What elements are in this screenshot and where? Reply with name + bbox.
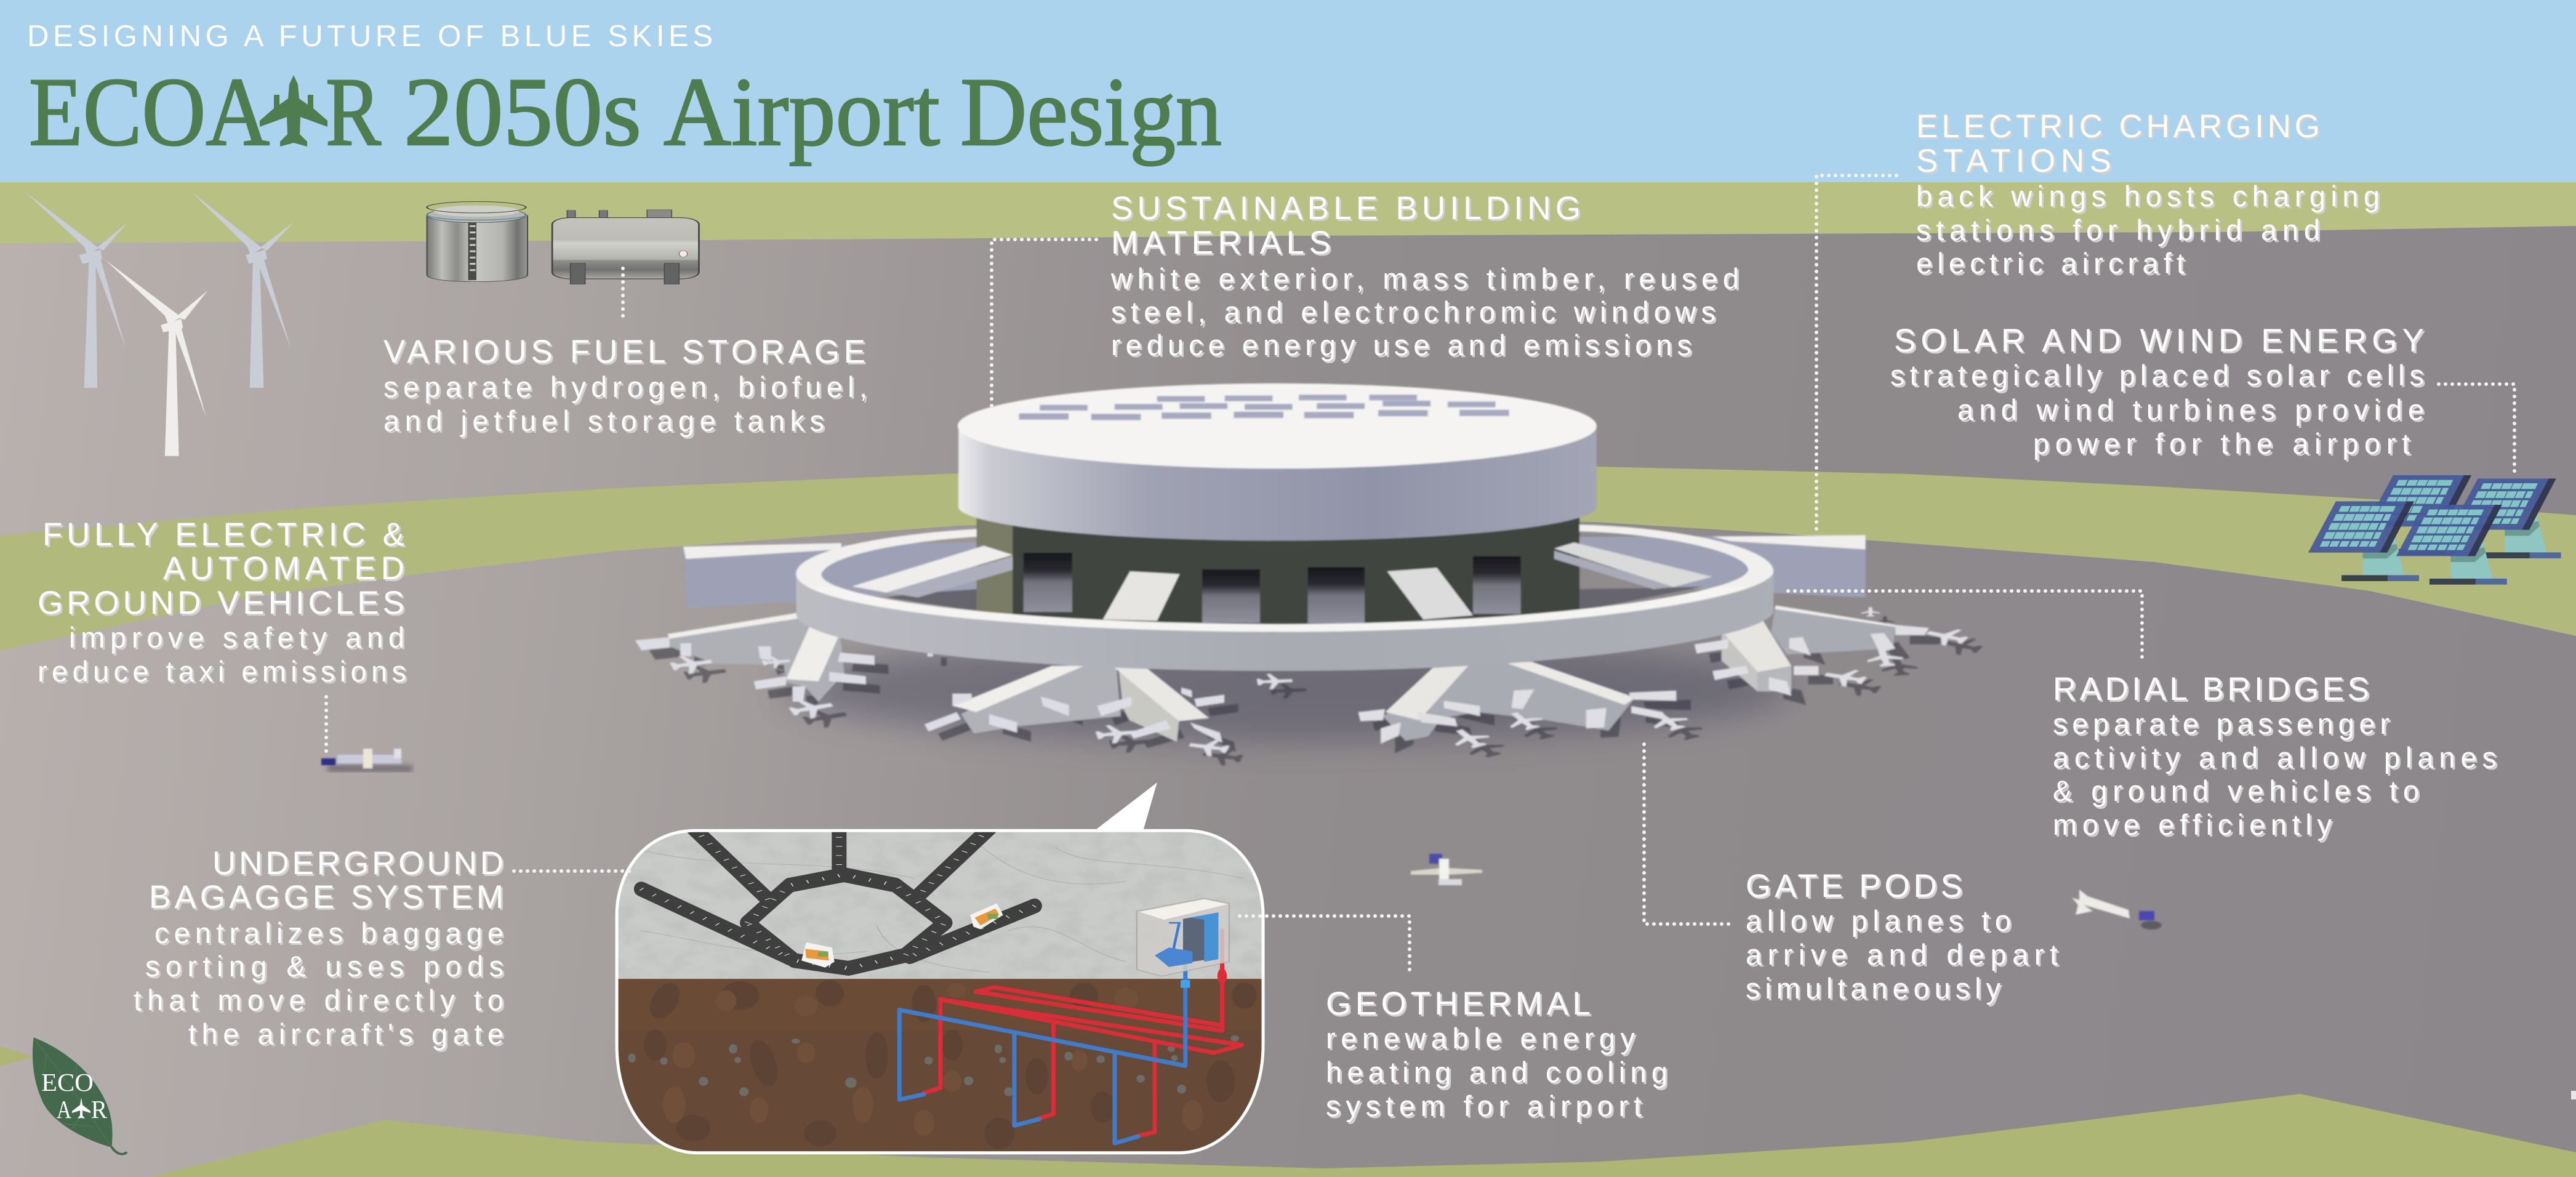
body: reduce taxi emissions	[38, 655, 406, 688]
concrete slab	[613, 829, 1268, 979]
body: separate hydrogen, biofuel,	[383, 371, 867, 403]
title: 2050s	[404, 58, 641, 166]
roof cylinder	[958, 384, 1597, 540]
title: Airport	[664, 58, 940, 166]
heading	[1111, 190, 1581, 261]
body: power for the airport	[2033, 427, 2410, 460]
body: sorting & uses pods	[145, 950, 504, 982]
logo: eco air leaf	[33, 1037, 126, 1154]
inset: baggage and geothermal cutaway	[613, 782, 1268, 1155]
logo wordmark: ECO	[41, 1068, 94, 1096]
body: and wind turbines provide	[1957, 393, 2424, 426]
callout: underground baggage system	[134, 845, 504, 1050]
body: strategically placed solar cells	[1890, 359, 2424, 392]
subtitle: DESIGNING A FUTURE OF BLUE SKIES	[27, 20, 713, 53]
title block	[27, 20, 1222, 166]
callout: solar and wind energy	[1890, 323, 2424, 460]
back wings	[683, 535, 1866, 608]
underground soil	[613, 979, 1268, 1155]
heading: UNDERGROUND	[212, 845, 504, 882]
leader: solar and wind	[2439, 384, 2514, 477]
callout: radial bridges	[2053, 671, 2497, 841]
title	[29, 58, 1222, 166]
body: and jetfuel storage tanks	[383, 404, 824, 437]
body: electric aircraft	[1916, 247, 2185, 279]
body	[1890, 359, 2424, 460]
inset outline	[617, 830, 1263, 1153]
body: improve safety and	[69, 621, 404, 654]
body: that move directly to	[134, 984, 504, 1016]
body: back wings hosts charging	[1916, 180, 2380, 212]
south-east and east gate pod piers	[1358, 605, 1988, 760]
callout: gate pods	[1746, 868, 2058, 1005]
aircraft: west apron	[321, 749, 412, 772]
logo wordmark: A	[57, 1095, 71, 1123]
title: ECOA	[29, 58, 270, 166]
body: the aircraft's gate	[188, 1018, 504, 1050]
baggage pods	[801, 903, 1003, 968]
heat pump unit	[1137, 898, 1229, 988]
body: separate passenger	[2053, 707, 2389, 740]
callout: various fuel storage	[383, 334, 867, 437]
body: heating and cooling	[1326, 1056, 1667, 1088]
aircraft shadows west	[649, 646, 1307, 767]
body	[1326, 1022, 1667, 1122]
icon: fuel storage tanks	[427, 202, 699, 284]
heading: GEOTHERMAL	[1326, 986, 1591, 1022]
parked aircraft east	[1358, 607, 1973, 750]
leaf shape	[33, 1037, 126, 1154]
callout: sustainable building materials	[1110, 190, 1739, 361]
leader: charging stations	[1816, 175, 1896, 532]
ground shadow below terminal	[782, 637, 1791, 742]
leader: geothermal	[1240, 916, 1410, 974]
body: steel, and electrochromic windows	[1111, 295, 1715, 328]
south-east pier	[1383, 662, 1635, 741]
heading	[149, 845, 504, 915]
heading: SOLAR AND WIND ENERGY	[1894, 323, 2424, 359]
aircraft: far east edge	[2571, 1091, 2576, 1099]
heading: RADIAL BRIDGES	[2053, 671, 2369, 707]
icon: solar panels	[2308, 475, 2561, 585]
icon: wind turbines	[25, 191, 294, 456]
grass: top band	[0, 182, 2576, 243]
logo wordmark: R	[91, 1095, 108, 1123]
inner bridges	[852, 542, 1712, 621]
leader: ground vehicles	[324, 697, 328, 757]
callout: electric charging stations	[1916, 108, 2380, 279]
aircraft: centre apron	[1411, 854, 1482, 885]
body	[1746, 904, 2058, 1005]
body: white exterior, mass timber, reused	[1110, 262, 1739, 295]
body: stations for hybrid and	[1916, 214, 2320, 246]
heading: GROUND VEHICLES	[38, 585, 404, 621]
horizontal tank	[552, 210, 699, 284]
leader: gate pods	[1644, 744, 1731, 924]
leader: radial bridges	[1788, 591, 2142, 661]
heading: BAGAGGE SYSTEM	[149, 879, 504, 915]
title: Design	[960, 58, 1222, 166]
parked aircraft west	[635, 637, 1294, 758]
leader: baggage	[514, 869, 632, 873]
heading: FULLY ELECTRIC &	[42, 516, 404, 553]
grass: ring band around the airport	[0, 467, 2576, 651]
grass: left edge patch	[0, 1046, 34, 1066]
geothermal pipes	[899, 931, 1242, 1143]
body	[2053, 707, 2497, 841]
baggage conveyors	[641, 828, 1035, 968]
heading: GATE PODS	[1746, 868, 1962, 904]
vertical tank	[427, 202, 528, 282]
west and south-west gate pod piers	[635, 613, 1307, 767]
callout: fully electric ground vehicles	[38, 516, 406, 688]
body: simultaneously	[1746, 972, 2000, 1005]
terminal body: back wings, rear ring, core and roof	[683, 384, 1866, 632]
body: system for airport	[1326, 1090, 1642, 1122]
title: R	[326, 58, 381, 166]
inset clipped illustration	[613, 828, 1268, 1155]
body: allow planes to	[1746, 904, 2011, 937]
rooftop solar panels	[1019, 395, 1509, 420]
heading	[1916, 108, 2320, 179]
heading: VARIOUS FUEL STORAGE	[383, 334, 865, 370]
callout: geothermal	[1326, 986, 1667, 1122]
heading	[38, 516, 404, 621]
inset pointer	[1094, 782, 1157, 831]
body	[383, 371, 867, 437]
body: reduce energy use and emissions	[1111, 329, 1691, 361]
inner building core	[977, 507, 1579, 625]
west pier	[667, 613, 845, 702]
body: centralizes baggage	[154, 917, 504, 949]
south-west pier	[952, 665, 1210, 742]
body	[1916, 180, 2380, 279]
heading: AUTOMATED	[163, 550, 404, 587]
rear of outer ring	[796, 524, 1773, 632]
heading: MATERIALS	[1111, 225, 1331, 261]
sky band	[0, 0, 2576, 182]
east pier	[1722, 605, 1895, 691]
heading: ELECTRIC CHARGING	[1916, 108, 2320, 145]
leader: sustainable materials	[992, 239, 1096, 408]
shaded floor inside ring	[886, 587, 1703, 611]
body	[134, 917, 504, 1050]
logo wordmark	[41, 1068, 108, 1123]
body: activity and allow planes	[2053, 741, 2497, 774]
heading: STATIONS	[1916, 143, 2111, 179]
aircraft: east apron	[2072, 890, 2162, 930]
body	[38, 621, 406, 688]
grass: bottom band	[0, 1094, 2576, 1177]
front of outer ring	[795, 576, 1774, 672]
body: arrive and depart	[1746, 938, 2058, 971]
body: & ground vehicles to	[2053, 774, 2419, 807]
body: move efficiently	[2053, 808, 2332, 841]
body: renewable energy	[1326, 1022, 1635, 1054]
heading: SUSTAINABLE BUILDING	[1111, 190, 1581, 227]
aircraft shadows east	[1373, 616, 1988, 760]
body	[1110, 262, 1739, 361]
leader: fuel storage	[621, 268, 625, 322]
airport terminal 3D model	[635, 384, 1988, 767]
